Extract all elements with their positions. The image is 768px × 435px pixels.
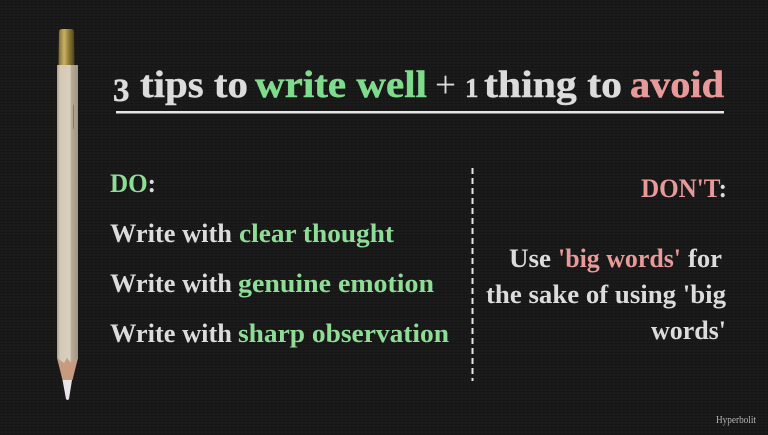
title: +	[435, 64, 456, 106]
title: write well	[255, 64, 427, 106]
do heading: DO:	[110, 169, 156, 198]
tip: clear thought: Write with	[110, 219, 233, 248]
title underline	[116, 111, 724, 114]
tip: sharp observation: Write with	[110, 319, 233, 348]
don't text line 1: Use	[509, 244, 551, 273]
tip highlight: genuine emotion: genuine emotion	[238, 269, 435, 298]
title: avoid	[630, 64, 724, 106]
panel: don't	[486, 174, 727, 345]
dashed divider	[472, 168, 474, 381]
panel: do list	[110, 169, 450, 348]
don't text line 1 end: for	[688, 244, 722, 273]
don't text line 3: words'	[651, 316, 726, 345]
don't text line 2: the sake of using 'big	[486, 280, 726, 309]
don't heading: DON'T:	[641, 174, 727, 203]
title: 1	[465, 73, 478, 103]
title	[113, 64, 724, 109]
tip: genuine emotion: Write with	[110, 269, 233, 298]
title: 3	[113, 73, 130, 109]
title: thing to	[484, 64, 622, 106]
tip highlight: clear thought: clear thought	[239, 219, 394, 248]
don't highlight: 'big words'	[558, 244, 681, 273]
title: tips to	[140, 64, 248, 106]
icon: pencil	[57, 29, 78, 400]
brand label: Hyperbolit	[716, 415, 756, 426]
tip highlight: sharp observation: sharp observation	[238, 319, 450, 348]
